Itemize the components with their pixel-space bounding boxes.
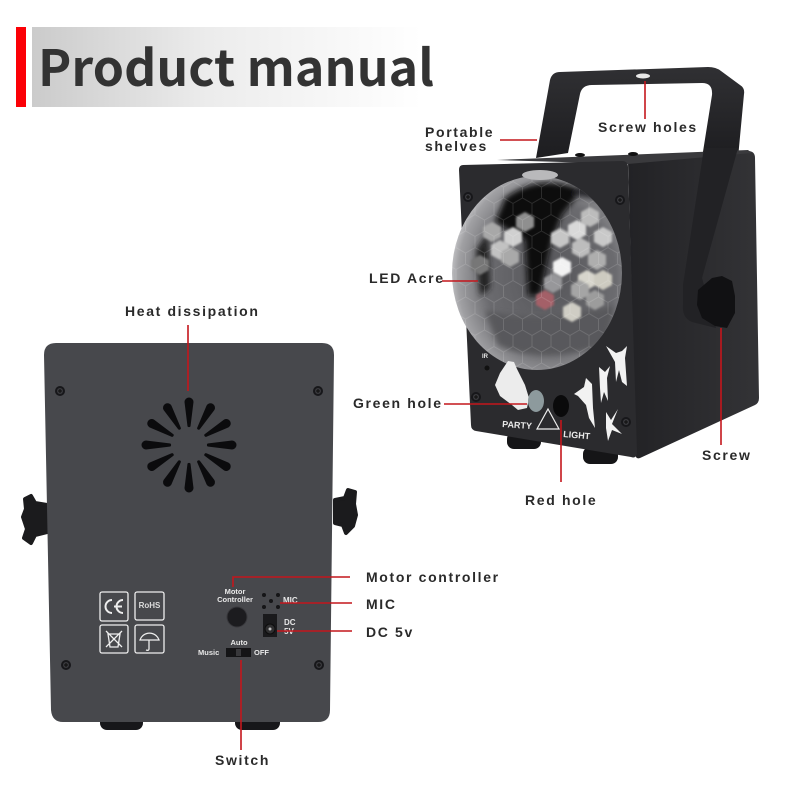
ball hexagon facets <box>471 207 612 322</box>
label: green hole: Green hole <box>353 395 443 411</box>
dc jack <box>263 614 296 637</box>
certification icons: RoHS <box>139 601 161 610</box>
label: MIC: MIC <box>366 596 397 612</box>
certification icons <box>100 592 164 653</box>
ir sensor <box>482 354 490 370</box>
party light text <box>502 419 591 441</box>
title banner <box>16 27 434 107</box>
motor controller button <box>217 587 253 627</box>
top screws <box>575 152 638 157</box>
mode switch <box>198 638 269 657</box>
mode switch: Music <box>198 648 219 657</box>
label: DC 5v: DC 5v <box>366 624 414 640</box>
label: portable shelves: shelves <box>425 138 488 154</box>
label: motor controller: Motor controller <box>366 569 500 585</box>
title: Product manual <box>38 29 434 101</box>
label: screw: Screw <box>702 447 752 463</box>
label: red hole: Red hole <box>525 492 597 508</box>
dc jack: DC <box>284 618 296 627</box>
front face <box>459 161 637 457</box>
label: heat dissipation: Heat dissipation <box>125 303 260 319</box>
feet <box>507 432 618 464</box>
label: switch: Switch <box>215 752 270 768</box>
mode switch: OFF <box>254 648 269 657</box>
ir sensor: IR <box>482 354 489 360</box>
screw knob <box>697 276 735 328</box>
dc jack: 5V <box>284 627 294 636</box>
dancer silhouettes <box>574 346 627 441</box>
back view of the device <box>23 343 356 730</box>
disco ball <box>452 170 622 370</box>
red leader lines <box>188 81 721 750</box>
party light text: PARTY <box>502 419 532 431</box>
motor controller button: Controller <box>217 595 253 604</box>
feet <box>100 712 280 730</box>
motor controller button: Motor <box>225 587 245 596</box>
ball dark reflections <box>476 175 618 355</box>
front view of the device <box>452 67 759 464</box>
red hole <box>553 395 569 417</box>
mode switch: Auto <box>230 638 248 647</box>
label: LED acre: LED Acre <box>369 270 445 286</box>
mic holes: MIC <box>283 596 298 605</box>
front screws <box>463 192 631 427</box>
party light text: LIGHT <box>563 429 591 441</box>
top edge <box>497 150 752 164</box>
label: portable shelves: Portable <box>425 124 494 140</box>
side knobs <box>23 490 356 543</box>
side face <box>628 151 759 458</box>
panel screws <box>55 386 324 670</box>
mic holes <box>262 593 298 609</box>
laser warning triangle <box>537 409 559 429</box>
label: screw holes: Screw holes <box>598 119 698 135</box>
top hole <box>636 74 650 78</box>
carrying handle <box>536 67 744 158</box>
heat vent slots <box>142 398 236 492</box>
green hole <box>528 390 544 412</box>
side strap <box>683 148 738 328</box>
ball top cap <box>522 170 558 180</box>
back panel <box>44 343 334 722</box>
dj figure <box>495 361 529 410</box>
